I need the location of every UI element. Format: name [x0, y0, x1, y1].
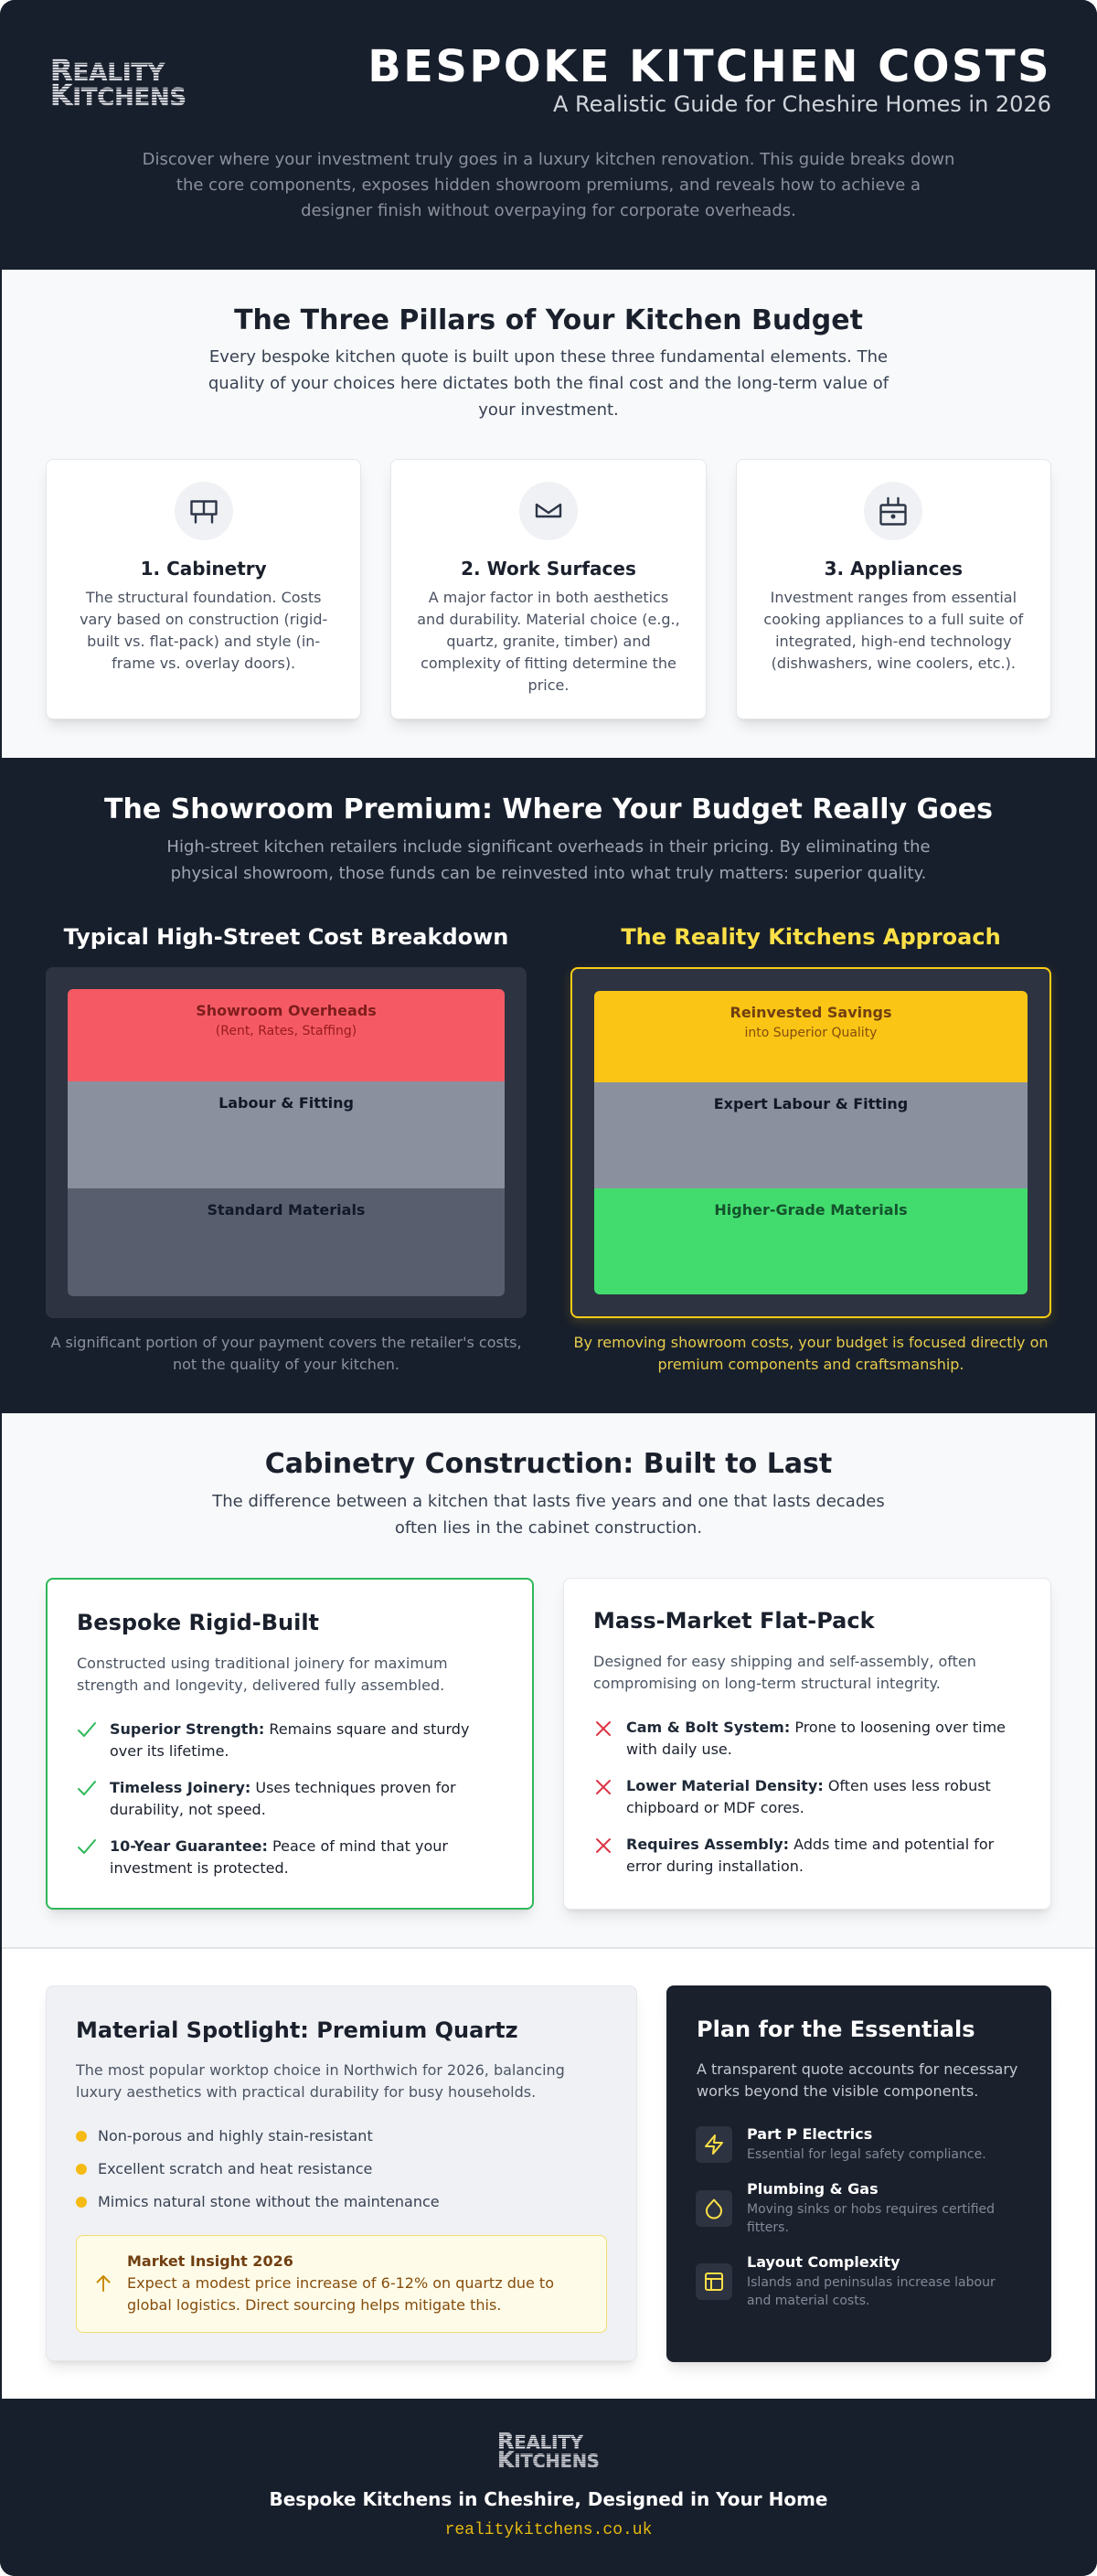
- list item: [596, 1777, 991, 1816]
- card text: A transparent quote accounts for necessary: [697, 2060, 1017, 2078]
- card: material spotlight: [46, 1985, 637, 2361]
- card text: The structural foundation. Costs: [86, 589, 322, 606]
- segment: showroom overheads: [68, 989, 505, 1081]
- subtitle: A Realistic Guide for Cheshire Homes in 2026: [553, 91, 1051, 117]
- header: [0, 0, 1097, 270]
- card text: [77, 1655, 448, 1694]
- column heading: typical: Typical High-Street Cost Breakdown: [64, 924, 508, 950]
- segment: materials: Standard Materials: [208, 1201, 365, 1219]
- card text: Constructed using traditional joinery for maximum: [77, 1655, 448, 1672]
- card: flat-pack: [563, 1578, 1051, 1910]
- icon: cross: [596, 1721, 611, 1736]
- card text: [417, 589, 680, 694]
- segment: reinvested savings: [594, 991, 1028, 1082]
- intro text: designer finish without overpaying for corporate overheads.: [301, 201, 796, 220]
- card title: Material Spotlight: Premium Quartz: [76, 2017, 518, 2043]
- item: layout: Islands and peninsulas increase labour: [747, 2275, 996, 2290]
- icon: check: [78, 1781, 96, 1795]
- callout: market insight: Market Insight 2026: [127, 2252, 293, 2270]
- segment: expert labour: Expert Labour & Fitting: [714, 1095, 908, 1112]
- panel: spotlight and essentials: [2, 1947, 1095, 2399]
- segment: showroom overheads: (Rent, Rates, Staffing): [216, 1024, 357, 1038]
- card: work surfaces: [390, 459, 707, 719]
- card text: cooking appliances to a full suite of: [763, 611, 1023, 628]
- card text: compromising on long-term structural integrity.: [593, 1675, 941, 1692]
- icon: cabinet: [175, 482, 233, 540]
- bullet: Mimics natural stone without the maintenance: [98, 2193, 440, 2210]
- card text: built vs. flat-pack) and style (in-: [87, 633, 320, 650]
- card text: The most popular worktop choice in Northwich for 2026, balancing: [76, 2061, 565, 2079]
- card text: [697, 2060, 1017, 2100]
- intro: [166, 837, 931, 883]
- icon: cross: [596, 1838, 611, 1853]
- heading: The Three Pillars of Your Kitchen Budget: [234, 304, 863, 336]
- list item: durability, not speed.: [110, 1801, 266, 1818]
- card text: [75, 2061, 565, 2101]
- callout: market insight: global logistics. Direct sourcing helps mitigate this.: [127, 2296, 501, 2314]
- card: appliances: [736, 459, 1051, 719]
- segment: reinvested savings: Reinvested Savings: [730, 1004, 891, 1021]
- card title: Plan for the Essentials: [697, 2017, 975, 2042]
- list item: Superior Strength: Remains square and sturdy: [110, 1720, 469, 1738]
- bullet: Excellent scratch and heat resistance: [98, 2160, 372, 2177]
- card text: Investment ranges from essential: [771, 589, 1017, 606]
- card title: Mass-Market Flat-Pack: [593, 1608, 875, 1634]
- card text: strength and longevity, delivered fully assembled.: [77, 1677, 444, 1694]
- card text: luxury aesthetics with practical durability for busy households.: [76, 2083, 536, 2101]
- intro: The difference between a kitchen that lasts five years and one that lasts decades: [212, 1492, 885, 1511]
- icon: check: [78, 1839, 96, 1854]
- card: rigid-built: [46, 1578, 534, 1910]
- card: essentials: Layout Complexity: [747, 2253, 900, 2271]
- list item: chipboard or MDF cores.: [626, 1799, 804, 1816]
- icon: check: [78, 1722, 96, 1737]
- website: realitykitchens.co.uk: [445, 2521, 652, 2539]
- card: cabinetry: [46, 459, 361, 719]
- segment: expert labour: [594, 1082, 1028, 1188]
- card text: [763, 589, 1024, 672]
- list item: over its lifetime.: [110, 1742, 229, 1760]
- panel: three pillars: [2, 270, 1095, 758]
- title: BESPOKE KITCHEN COSTS: [367, 41, 1051, 92]
- card text: price.: [528, 676, 569, 694]
- intro text: Discover where your investment truly goes in a luxury kitchen renovation. This guide breaks down: [143, 150, 954, 169]
- list item: error during installation.: [626, 1857, 804, 1875]
- segment: labour: [68, 1081, 505, 1188]
- list item: [78, 1720, 469, 1760]
- list item: Lower Material Density: Often uses less robust: [626, 1777, 991, 1794]
- caption: typical: [50, 1334, 522, 1373]
- panel: cabinetry construction: [2, 1413, 1095, 1947]
- list item: 10-Year Guarantee: Peace of mind that your: [110, 1837, 448, 1855]
- segment: materials: [68, 1188, 505, 1296]
- panel: showroom premium: [0, 758, 1097, 1413]
- intro text: the core components, exposes hidden showroom premiums, and reveals how to achieve a: [176, 176, 921, 195]
- list item: Cam & Bolt System: Prone to loosening over time: [626, 1719, 1006, 1736]
- card text: Designed for easy shipping and self-assembly, often: [593, 1653, 976, 1670]
- intro: Every bespoke kitchen quote is built upon these three fundamental elements. The: [209, 347, 888, 367]
- caption: typical: A significant portion of your payment covers the retailer's costs,: [50, 1334, 522, 1351]
- segment: higher-grade materials: Higher-Grade Materials: [714, 1201, 908, 1219]
- card text: works beyond the visible components.: [697, 2082, 978, 2100]
- list item: [78, 1779, 456, 1818]
- caption: reality: premium components and craftsmanship.: [657, 1356, 964, 1373]
- item: electrics: [696, 2125, 986, 2163]
- footer: [0, 2399, 1097, 2576]
- list item: [596, 1836, 995, 1875]
- card title: 3. Appliances: [825, 558, 963, 580]
- card title: Bespoke Rigid-Built: [77, 1610, 319, 1635]
- chart: reality approach: [570, 967, 1051, 1318]
- list item: Timeless Joinery: Uses techniques proven for: [110, 1779, 456, 1796]
- item: electrics: Essential for legal safety compliance.: [747, 2147, 986, 2162]
- card text: A major factor in both aesthetics: [429, 589, 668, 606]
- card text: [593, 1653, 976, 1692]
- icon: arrow up: [97, 2275, 110, 2292]
- card: essentials: Plumbing & Gas: [747, 2180, 879, 2198]
- segment: labour: Labour & Fitting: [218, 1094, 354, 1112]
- caption: reality: By removing showroom costs, your budget is focused directly on: [574, 1334, 1048, 1351]
- chart: typical cost breakdown: [46, 967, 527, 1318]
- card title: 2. Work Surfaces: [461, 558, 636, 580]
- callout: market insight: Expect a modest price increase of 6-12% on quartz due to: [127, 2274, 554, 2292]
- bullet: Non-porous and highly stain-resistant: [98, 2127, 373, 2145]
- card text: vary based on construction (rigid-: [80, 611, 327, 628]
- icon: bolt: [696, 2126, 732, 2163]
- item: layout: [696, 2253, 996, 2308]
- item: plumbing: [696, 2180, 995, 2235]
- item: electrics: Part P Electrics: [747, 2125, 872, 2143]
- icon: layout: [696, 2263, 732, 2300]
- list item: Requires Assembly: Adds time and potential for: [626, 1836, 994, 1853]
- logo: [497, 2431, 600, 2469]
- icon: drop: [696, 2190, 732, 2227]
- item: plumbing: fitters.: [747, 2220, 789, 2235]
- intro: High-street kitchen retailers include significant overheads in their pricing. By eliminating the: [166, 837, 931, 857]
- card text: quartz, granite, timber) and: [446, 633, 651, 650]
- card text: and durability. Material choice (e.g.,: [417, 611, 680, 628]
- caption: reality: [574, 1334, 1048, 1373]
- card text: integrated, high-end technology: [775, 633, 1012, 650]
- card text: frame vs. overlay doors).: [112, 655, 295, 672]
- segment: higher-grade materials: [594, 1188, 1028, 1294]
- item: layout: and material costs.: [747, 2294, 869, 2308]
- icon: appliance: [864, 482, 922, 540]
- list item: with daily use.: [626, 1740, 732, 1758]
- caption: typical: not the quality of your kitchen.: [173, 1356, 399, 1373]
- card text: complexity of fitting determine the: [421, 655, 676, 672]
- callout: market insight: [76, 2235, 607, 2333]
- intro: physical showroom, those funds can be reinvested into what truly matters: superior quality.: [171, 864, 926, 883]
- card: essentials: [666, 1985, 1051, 2362]
- item: plumbing: Moving sinks or hobs requires certified: [747, 2202, 995, 2217]
- intro: often lies in the cabinet construction.: [395, 1518, 702, 1538]
- heading: The Showroom Premium: Where Your Budget Really Goes: [104, 793, 993, 825]
- column heading: reality: The Reality Kitchens Approach: [621, 924, 1001, 950]
- intro: [212, 1492, 885, 1538]
- intro: your investment.: [478, 400, 619, 420]
- card text: [80, 589, 327, 672]
- intro text: [143, 150, 954, 220]
- card title: 1. Cabinetry: [141, 558, 267, 580]
- heading: Cabinetry Construction: Built to Last: [265, 1448, 832, 1480]
- list item: [596, 1719, 1006, 1758]
- logo: [50, 57, 186, 108]
- intro: [208, 347, 889, 420]
- segment: reinvested savings: into Superior Quality: [744, 1026, 877, 1040]
- icon: worktop: [519, 482, 578, 540]
- intro: quality of your choices here dictates both the final cost and the long-term value of: [208, 374, 889, 393]
- list item: [78, 1837, 448, 1877]
- segment: showroom overheads: Showroom Overheads: [196, 1002, 377, 1019]
- tagline: Bespoke Kitchens in Cheshire, Designed in Your Home: [269, 2488, 827, 2510]
- list item: investment is protected.: [110, 1859, 289, 1877]
- bullet list: [76, 2127, 440, 2210]
- icon: cross: [596, 1780, 611, 1794]
- card text: (dishwashers, wine coolers, etc.).: [772, 655, 1016, 672]
